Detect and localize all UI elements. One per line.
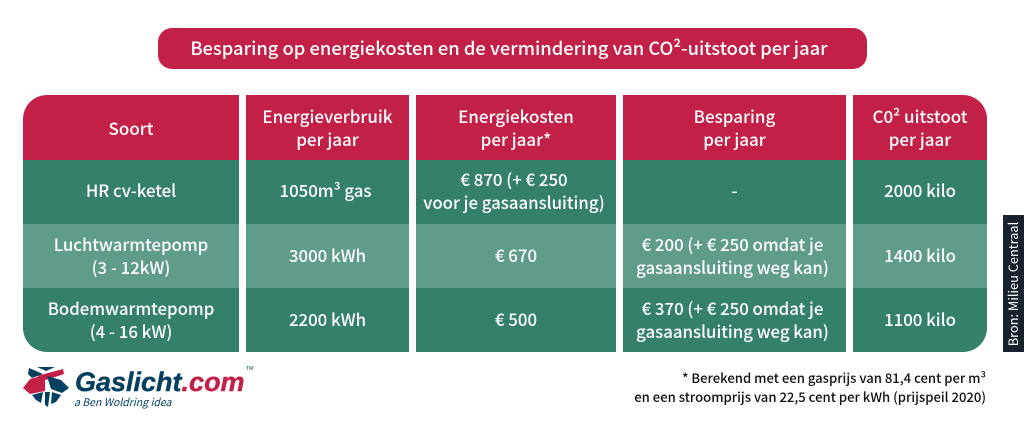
- column: Besparing: [623, 95, 846, 352]
- cell: 1100 kilo: 1100 kilo: [884, 307, 956, 331]
- logo: Gaslicht.com: [23, 366, 253, 410]
- column: Energieverbruik: [246, 95, 409, 352]
- cell: 500 euro: € 500: [495, 307, 537, 331]
- source label: Bron: Milieu Centraal: [1003, 221, 1022, 346]
- trademark: TM: [246, 366, 253, 372]
- cell: 870 euro: [416, 160, 616, 224]
- cell: 670 euro: [416, 224, 616, 288]
- cell: 370 euro saving: € 370 (+ € 250 omdat je: [642, 296, 823, 320]
- table: comparison of heating types: [23, 95, 987, 352]
- cell: 200 euro saving: [623, 224, 846, 288]
- cell: 1400 kilo: 1400 kilo: [884, 243, 956, 267]
- cell: 3000 kWh: 3000 kWh: [289, 243, 366, 267]
- cell: Luchtwarmtepomp: Luchtwarmtepomp: [54, 232, 208, 256]
- header: CO2 uitstoot: C0² uitstoot: [872, 103, 968, 128]
- cell: Luchtwarmtepomp: (3 - 12kW): [92, 254, 170, 278]
- header: Besparing: per jaar: [703, 126, 766, 151]
- cell: HR cv-ketel: [23, 160, 239, 224]
- cell: 670 euro: € 670: [495, 243, 537, 267]
- title: [158, 28, 867, 69]
- cell: 370 euro saving: gasaansluiting weg kan): [636, 318, 829, 342]
- cell: 1050m3 gas: [246, 160, 409, 224]
- footnote: [634, 368, 986, 406]
- header: Energiekosten: Energiekosten: [458, 103, 574, 128]
- cell: 870 euro: € 870 (+ € 250: [460, 166, 568, 190]
- header: Energieverbruik: [246, 95, 409, 160]
- header: Soort: [23, 95, 239, 160]
- tagline: a Ben Woldring idea: [74, 395, 171, 410]
- cell: Bodemwarmtepomp: Bodemwarmtepomp: [48, 296, 214, 320]
- cell: 3000 kWh: [246, 224, 409, 288]
- header: Energieverbruik: per jaar: [296, 126, 359, 151]
- header: Besparing: Besparing: [694, 103, 775, 128]
- header: Energiekosten: [416, 95, 616, 160]
- header: Energieverbruik: Energieverbruik: [262, 103, 393, 128]
- cell: 2200 kWh: [246, 288, 409, 352]
- cell: 1050m3 gas: 1050m³ gas: [280, 178, 371, 202]
- cell: Bodemwarmtepomp: (4 - 16 kW): [90, 318, 172, 342]
- column: Energiekosten: [416, 95, 616, 352]
- header: Soort: Soort: [109, 114, 153, 140]
- icon: logo mark: [23, 367, 69, 407]
- footnote: * Berekend met een gasprijs van 81,4 cent per m³: [682, 368, 986, 387]
- header: Besparing: [623, 95, 846, 160]
- cell: 2000 kilo: [853, 160, 987, 224]
- cell: 200 euro saving: € 200 (+ € 250 omdat je: [642, 232, 823, 256]
- column: CO2 uitstoot: [853, 95, 987, 352]
- footnote: en een stroomprijs van 22,5 cent per kWh (prijspeil 2020): [634, 387, 986, 406]
- wordmark: Gaslicht.com: [75, 367, 245, 397]
- cell: 200 euro saving: gasaansluiting weg kan): [636, 254, 829, 278]
- cell: 2200 kWh: 2200 kWh: [289, 307, 366, 331]
- header: Energiekosten: per jaar*: [481, 126, 551, 151]
- cell: Luchtwarmtepomp: [23, 224, 239, 288]
- column: Soort: [23, 95, 239, 352]
- header: CO2 uitstoot: [853, 95, 987, 160]
- cell: no saving: [623, 160, 846, 224]
- cell: 1100 kilo: [853, 288, 987, 352]
- title: Besparing op energiekosten en de vermindering van CO²-uitstoot per jaar: [190, 34, 828, 60]
- cell: Bodemwarmtepomp: [23, 288, 239, 352]
- cell: 500 euro: [416, 288, 616, 352]
- cell: 370 euro saving: [623, 288, 846, 352]
- cell: 870 euro: voor je gasaansluiting): [423, 190, 605, 214]
- cell: 1400 kilo: [853, 224, 987, 288]
- cell: no saving: -: [732, 178, 738, 202]
- cell: HR cv-ketel: HR cv-ketel: [86, 178, 176, 202]
- header: CO2 uitstoot: per jaar: [889, 126, 951, 151]
- cell: 2000 kilo: 2000 kilo: [884, 178, 956, 202]
